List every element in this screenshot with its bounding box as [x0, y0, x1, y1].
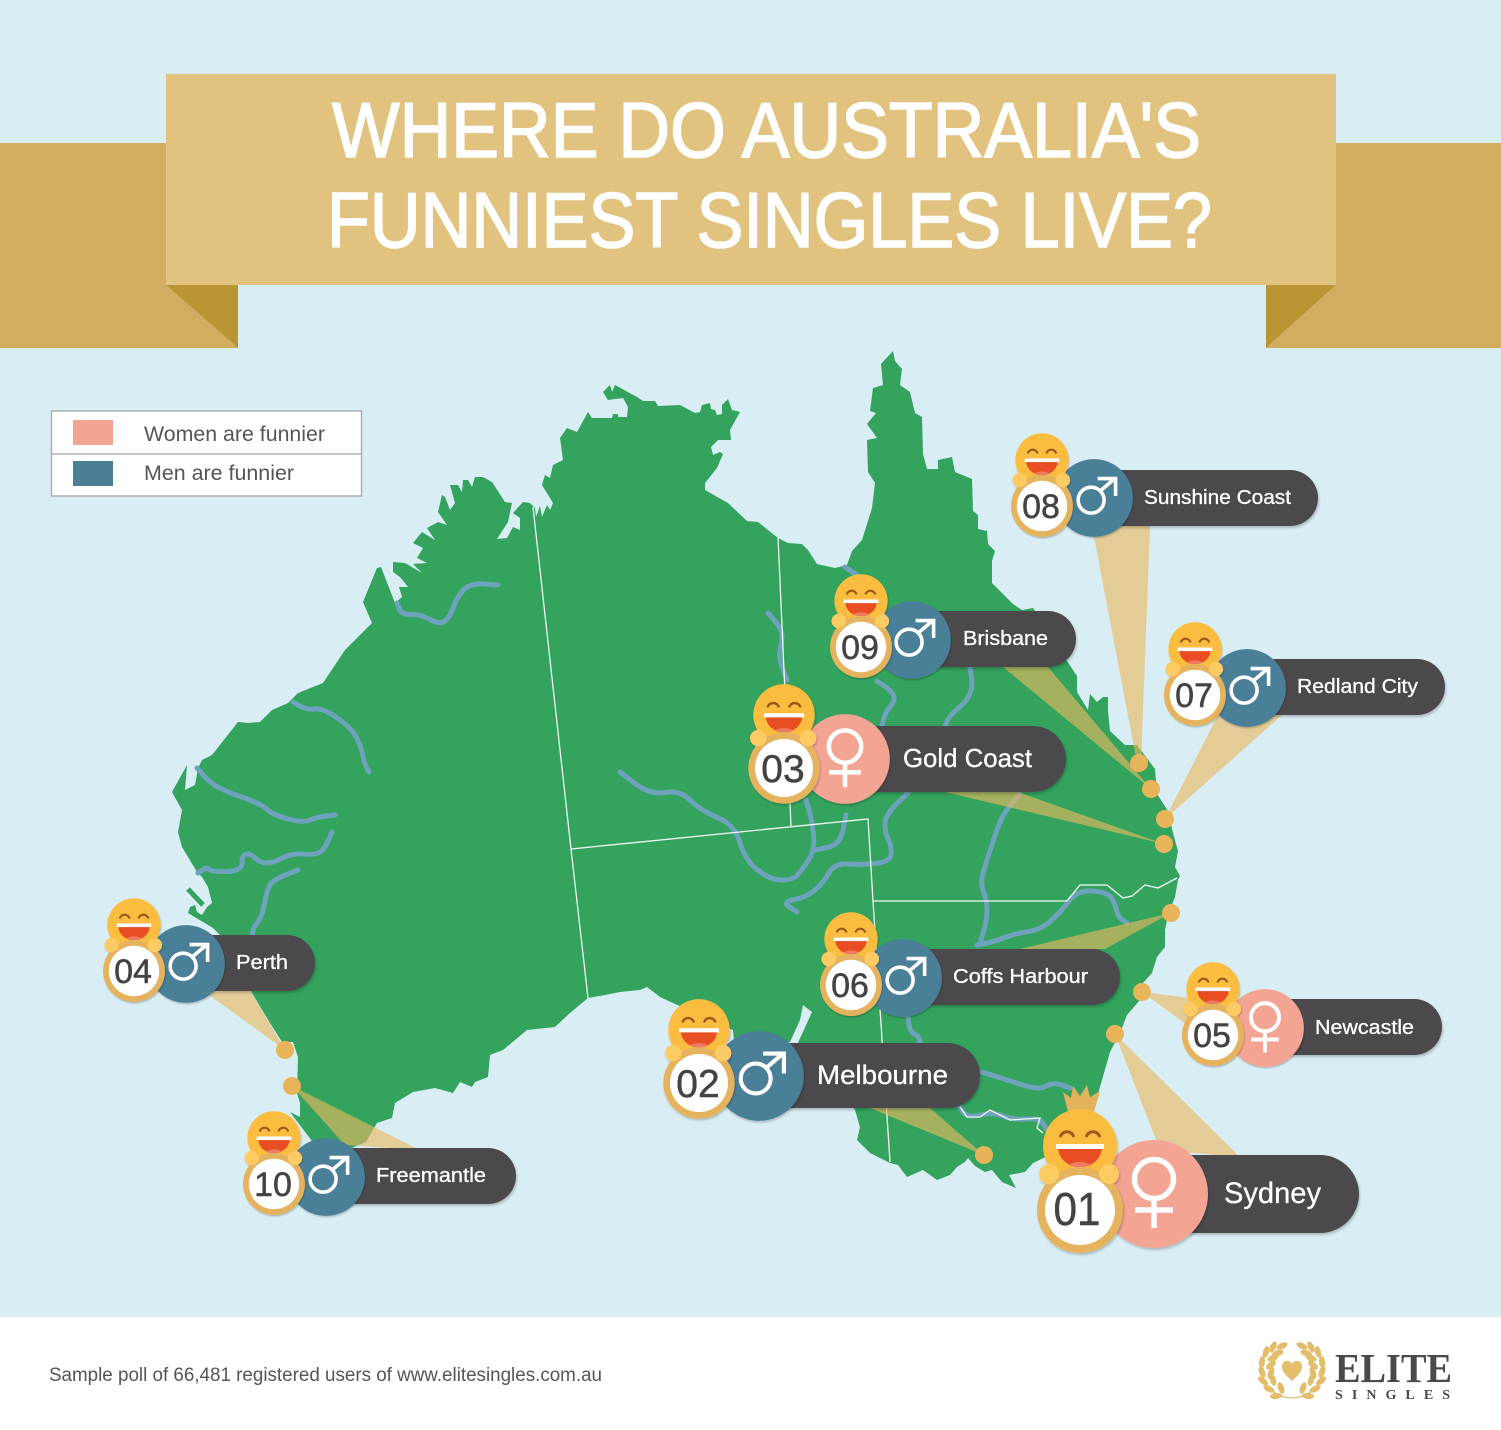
marker 10 Freemantle — [243, 1111, 516, 1216]
marker 05 Newcastle: 05 — [1193, 1017, 1231, 1055]
source note: Sample poll of 66,481 registered users of www.elitesingles.com.au — [49, 1365, 602, 1386]
marker 04 Perth — [103, 898, 315, 1003]
marker 03 Gold Coast: Gold Coast — [903, 743, 1033, 773]
marker 09 Brisbane — [830, 574, 1076, 679]
marker 06 Coffs Harbour — [820, 912, 1120, 1017]
marker 10 Freemantle: Freemantle — [376, 1165, 486, 1187]
title: WHERE DO AUSTRALIA'S — [332, 86, 1201, 174]
marker 09 Brisbane: 09 — [841, 629, 879, 667]
footer band — [0, 1317, 1501, 1430]
marker 04 Perth: Perth — [236, 952, 288, 974]
marker 09 Brisbane: Brisbane — [963, 628, 1048, 650]
marker 04 Perth: 04 — [114, 953, 152, 991]
marker 02 Melbourne: 02 — [676, 1063, 720, 1106]
location beams — [205, 526, 1282, 1157]
marker 08 Sunshine Coast: Sunshine Coast — [1144, 487, 1291, 509]
marker 10 Freemantle: 10 — [254, 1166, 292, 1204]
marker 06 Coffs Harbour: Coffs Harbour — [953, 966, 1088, 988]
logo: Elite Singles: SINGLES — [1335, 1388, 1450, 1403]
logo: Elite Singles — [1256, 1340, 1452, 1403]
marker 07 Redland City — [1164, 622, 1445, 727]
marker 08 Sunshine Coast: 08 — [1022, 488, 1060, 526]
legend — [52, 411, 362, 496]
rivers — [197, 567, 1127, 1130]
state borders — [533, 507, 1177, 1162]
marker 08 Sunshine Coast — [1011, 433, 1318, 537]
marker 03 Gold Coast: 03 — [761, 748, 805, 791]
logo: Elite Singles: ELITE — [1335, 1345, 1452, 1391]
marker 07 Redland City: 07 — [1175, 677, 1213, 715]
mainland — [172, 351, 1180, 1188]
title: FUNNIEST SINGLES LIVE? — [327, 176, 1212, 264]
marker 02 Melbourne — [663, 999, 980, 1121]
banner ribbon — [0, 74, 1501, 348]
title — [327, 86, 1212, 264]
marker 01 Sydney — [1037, 1085, 1359, 1253]
marker 06 Coffs Harbour: 06 — [831, 967, 869, 1005]
location dots — [276, 754, 1180, 1164]
legend: Women are funnier — [144, 423, 325, 446]
legend: Men are funnier — [144, 462, 294, 485]
marker 05 Newcastle: Newcastle — [1315, 1017, 1414, 1039]
marker 02 Melbourne: Melbourne — [817, 1060, 948, 1090]
marker 05 Newcastle — [1182, 962, 1442, 1067]
marker 01 Sydney: Sydney — [1224, 1177, 1321, 1210]
marker 03 Gold Coast — [748, 684, 1066, 804]
map of Australia — [172, 351, 1180, 1188]
marker 01 Sydney: 01 — [1054, 1183, 1100, 1235]
marker 07 Redland City: Redland City — [1297, 676, 1418, 698]
